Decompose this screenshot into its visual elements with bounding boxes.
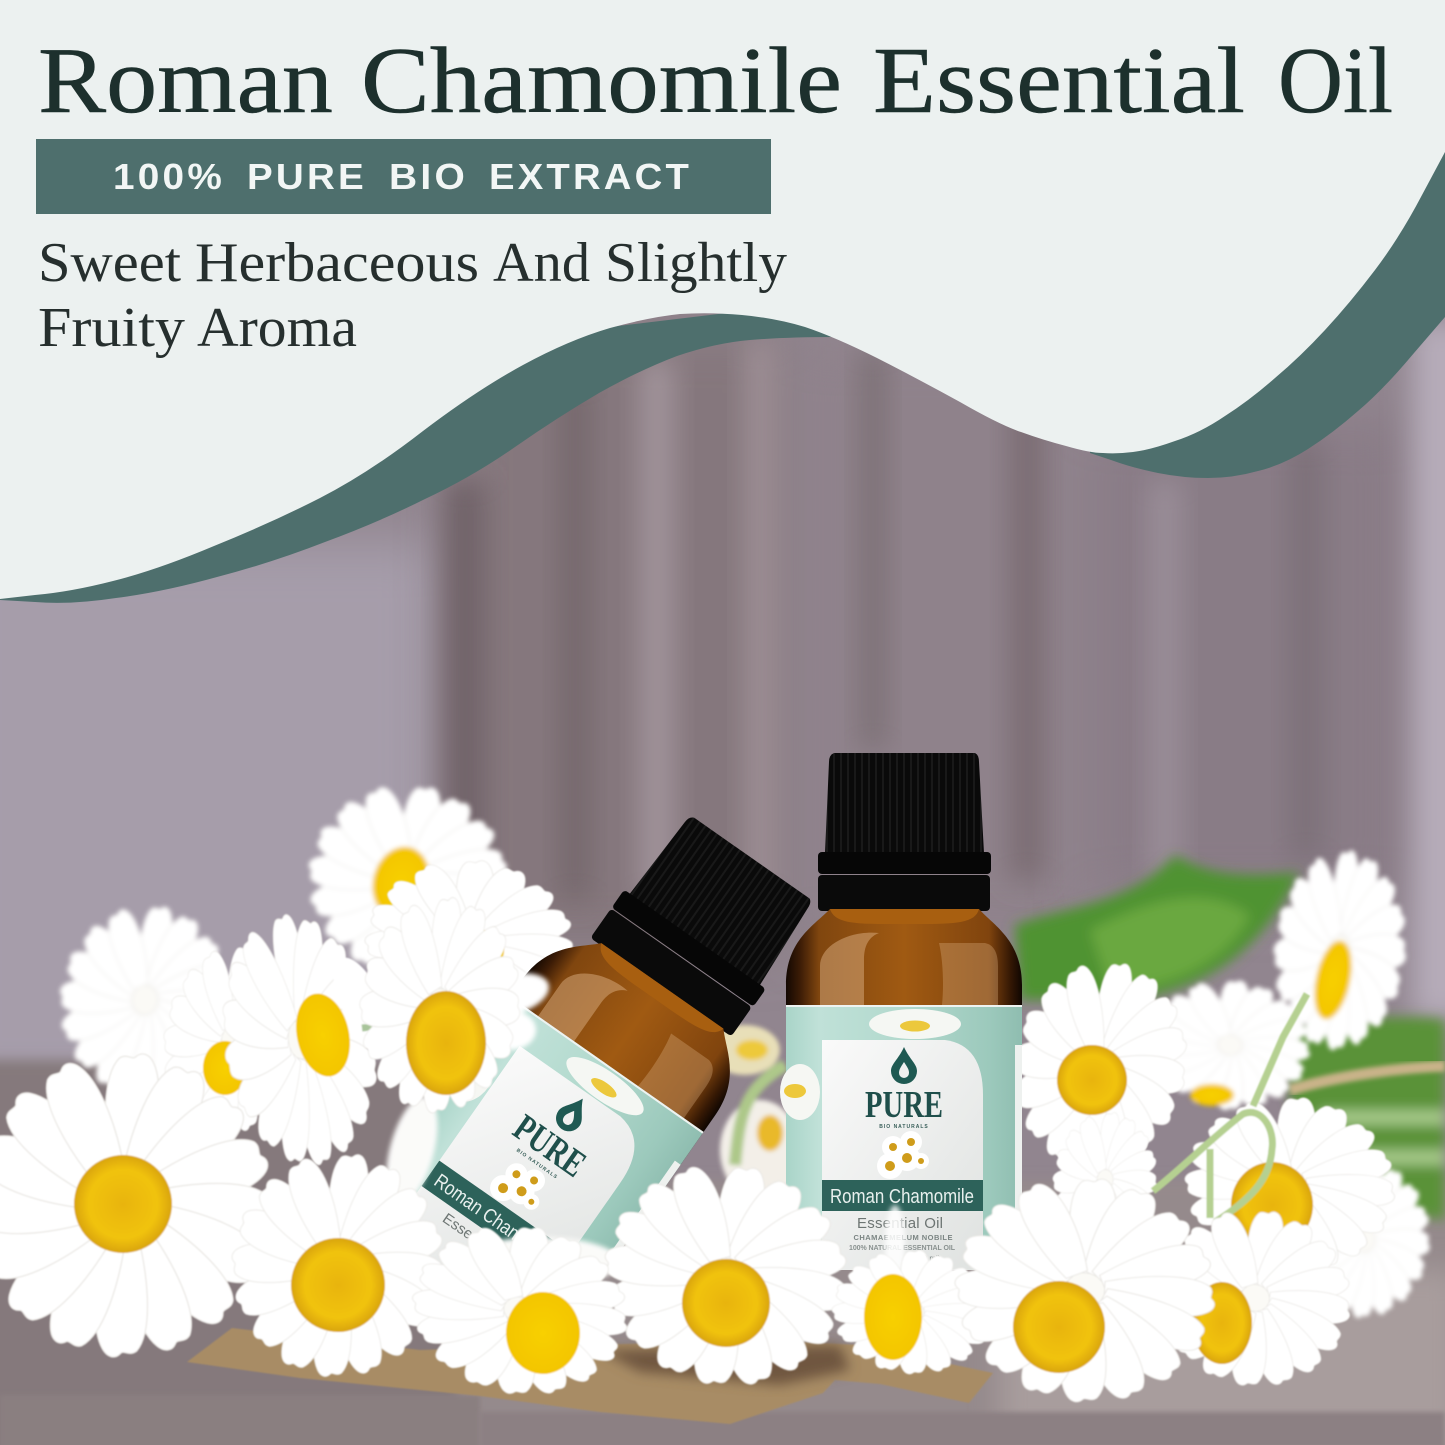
upright label text: PURE <box>865 1084 943 1126</box>
title: Roman <box>38 29 333 133</box>
daisy: second back <box>356 851 583 1040</box>
subtitle: Slightly <box>605 232 787 294</box>
daisy: back top <box>289 766 526 995</box>
cream top panel <box>0 0 1445 599</box>
daisy: front under bottle <box>827 1244 997 1380</box>
daisy: lower right upper <box>1175 1086 1404 1285</box>
subtitle: And <box>493 232 590 294</box>
daisy: right top <box>1265 844 1415 1057</box>
tilted label text: Essential Oil <box>439 1210 517 1272</box>
daisy: lower left <box>216 1139 459 1392</box>
daisy: front centre left <box>399 1210 641 1411</box>
daisy: over tilted bottle shoulder <box>350 890 530 1121</box>
daisy: far left pale <box>43 891 246 1109</box>
pale flowers beside bottles <box>710 1025 800 1200</box>
daisy: large left <box>0 1040 287 1371</box>
upright label text: Essential Oil <box>857 1215 943 1232</box>
title: Oil <box>1278 29 1393 133</box>
banner: EXTRACT <box>489 156 692 197</box>
title <box>38 29 1393 133</box>
daisy: left mid <box>150 936 313 1145</box>
subtitle: Fruity <box>38 297 185 359</box>
upright label text: (30 ml) <box>916 1254 941 1263</box>
tilted label text: Roman Chamomile <box>430 1170 560 1271</box>
daisy: front lower right far <box>1144 1194 1365 1402</box>
daisy: right middle back <box>1142 972 1317 1119</box>
subtitle: Sweet <box>38 232 181 294</box>
soft petals over bottles <box>377 965 905 1287</box>
bottle: tilted <box>353 787 848 1349</box>
upright label text: Roman Chamomile <box>830 1186 974 1208</box>
flower stem <box>362 1022 412 1028</box>
blurred flowers and stems behind bottles <box>43 766 1438 1325</box>
tilted label text: BIO NATURALS <box>515 1148 559 1181</box>
tilted label text <box>416 1087 619 1290</box>
title: Chamomile <box>361 29 842 133</box>
banner: 100% <box>113 156 225 197</box>
banner: BIO <box>389 156 468 197</box>
upright label text: 100% NATURAL ESSENTIAL OIL <box>849 1245 956 1252</box>
upright label text: BIO NATURALS <box>879 1124 929 1130</box>
subtitle <box>38 232 787 359</box>
upright label text: CHAMAEMELUM NOBILE <box>854 1233 952 1242</box>
subtitle: Aroma <box>197 297 357 359</box>
daisy: front centre <box>582 1142 869 1409</box>
greenery behind flowers <box>1015 855 1445 1220</box>
daisy: small behind right <box>1045 1107 1164 1254</box>
banner: PURE <box>247 156 367 197</box>
burlap cloth <box>187 1328 993 1424</box>
daisy: beside bottle <box>993 945 1206 1186</box>
green wave bands <box>0 150 1445 603</box>
curved stems <box>1153 994 1307 1222</box>
title: Essential <box>873 29 1245 133</box>
banner <box>36 139 771 214</box>
tilted label text: PURE <box>506 1107 594 1186</box>
middle flowers <box>150 851 1206 1186</box>
bottle: upright <box>780 753 1022 1270</box>
front flowers <box>0 890 1404 1416</box>
daisy: left upper <box>206 904 398 1177</box>
daisy: front right <box>942 1165 1227 1416</box>
upright label text <box>830 1084 974 1263</box>
subtitle: Herbaceous <box>195 232 479 294</box>
daisy: right lower back <box>1291 1155 1438 1325</box>
